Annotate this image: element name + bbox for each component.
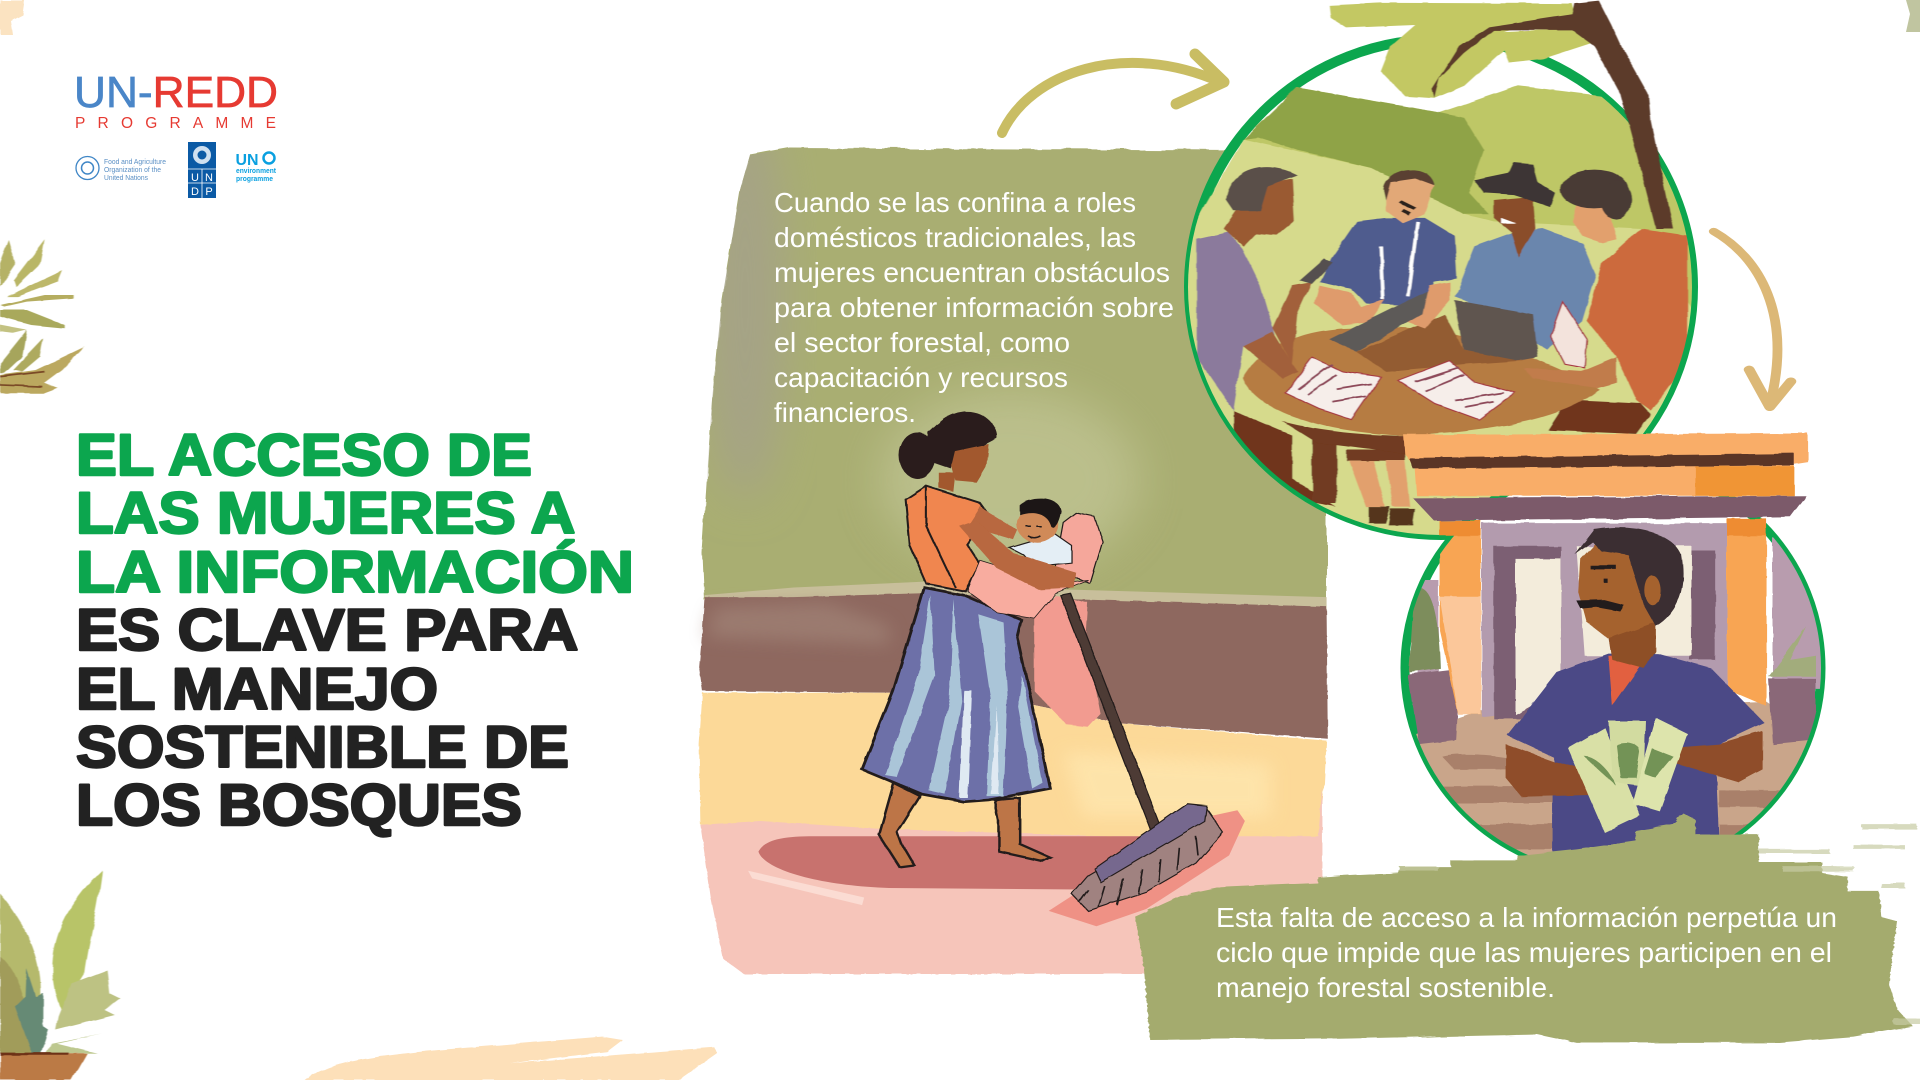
logo: FAO: Organization of the [104, 167, 161, 174]
skirt [862, 588, 1050, 802]
ear [1645, 576, 1661, 605]
blouse [906, 486, 989, 591]
decoration: top-left peach wash [0, 0, 24, 34]
baby head [1017, 506, 1058, 543]
programme: PROGRAMME [75, 115, 276, 132]
wordmark: UN-REDD [74, 68, 278, 117]
hills [1198, 85, 1692, 308]
logo: FAO: Food and Agriculture [104, 159, 166, 166]
circle scene [1179, 86, 1700, 536]
baby shirt [1009, 534, 1072, 566]
upper arm [968, 507, 1018, 540]
roof beam [1413, 496, 1806, 521]
text block: first explanation: el sector forestal, como [774, 327, 1070, 358]
table legs and legs of man [1312, 432, 1405, 504]
broom shadow [1049, 810, 1245, 926]
roof orange [1404, 433, 1808, 496]
logo: UNDP [188, 142, 216, 198]
title: dark part: SOSTENIBLE DE [76, 715, 569, 780]
baby hair [1020, 499, 1061, 527]
table [1243, 328, 1599, 436]
sling tail [1034, 595, 1101, 727]
benches [1233, 411, 1337, 507]
roof stripe [1409, 454, 1794, 468]
panel: watercolor background of woman sweeping [699, 100, 1328, 974]
logo: UN environment programme [236, 152, 277, 183]
man 4 [1587, 229, 1688, 411]
circle ring [1405, 463, 1821, 873]
man 1 [1197, 232, 1275, 411]
text block: first explanation: financieros. [774, 397, 916, 428]
title: green part: LA INFORMACIÓN [76, 540, 634, 605]
faded brush streaks [1399, 824, 1920, 1024]
arrow: olive curved arrow to men [1002, 54, 1224, 133]
wall wash: grey left edge and pale halo [705, 100, 1140, 570]
title [76, 423, 634, 838]
decoration: bottom-left potted plant [0, 870, 120, 1080]
text block: first explanation: para obtener información sobre [774, 292, 1174, 323]
moustache [1577, 600, 1624, 612]
tree trunk [1432, 1, 1673, 229]
pots and plants [1409, 588, 1440, 673]
circle ring [1189, 39, 1693, 535]
eyes and brow [1591, 567, 1616, 581]
skirt stripes [885, 595, 1042, 796]
title: dark part: ES CLAVE PARA [76, 598, 577, 663]
panel: green brush behind bottom text [1135, 814, 1920, 1043]
band: pink floor [700, 787, 1322, 974]
title: dark part: EL MANEJO [76, 657, 438, 722]
logo: UN environment programme: UN [236, 152, 258, 169]
sling back [1055, 513, 1103, 584]
logo: UNDP: N [205, 172, 213, 184]
illustration: woman with baby and broom [862, 411, 1223, 911]
arms [1506, 744, 1616, 797]
baby [1009, 499, 1072, 566]
decoration: bottom peach brush stroke [305, 1037, 717, 1080]
shadow under woman [758, 836, 1146, 890]
logo: UN-REDD Programme [74, 68, 278, 198]
laptops [1329, 291, 1427, 352]
hair [926, 411, 997, 469]
side wall [1773, 538, 1826, 689]
text block: first explanation: Cuando se las confina a roles [774, 187, 1136, 218]
broom head [1094, 804, 1206, 882]
man 2 shirt lines [1381, 221, 1418, 300]
logo: FAO: United Nations [104, 175, 148, 182]
band: yellow floor [699, 693, 1327, 840]
text block: first explanation: capacitación y recursos [774, 362, 1068, 393]
column caps [1440, 519, 1767, 536]
baby face [1026, 526, 1041, 538]
neck [939, 473, 955, 492]
man 3 [1454, 229, 1596, 350]
books on table [1285, 357, 1381, 420]
door wall [1482, 523, 1727, 717]
house roof and man [1404, 433, 1808, 854]
text block: first explanation: mujeres encuentran obstáculos [774, 257, 1170, 288]
circle scene [1408, 518, 1821, 855]
text block: first explanation: domésticos tradicionales, las [774, 222, 1136, 253]
sling [968, 561, 1088, 618]
tree foliage and trunk [1329, 1, 1673, 229]
hair bun [899, 433, 936, 478]
illustration: man with money in front of house [1395, 433, 1830, 883]
face [1579, 529, 1668, 639]
text block: second explanation: manejo forestal sostenible. [1216, 972, 1555, 1003]
band: pale tan and brown wainscot [699, 582, 1328, 974]
columns [1440, 521, 1481, 715]
man 4 curly hair [1560, 170, 1632, 220]
title: green part: EL ACCESO DE [76, 423, 532, 488]
man 2 [1319, 218, 1457, 307]
band: olive wall [702, 148, 1326, 610]
bristle ticks [1080, 836, 1198, 907]
money [1568, 727, 1640, 832]
blouse fold [926, 486, 955, 588]
collar [1608, 656, 1648, 706]
broom handle [1060, 593, 1162, 832]
logo: FAO [76, 156, 166, 182]
shirt [1508, 654, 1765, 854]
text block: second explanation: ciclo que impide que las mujeres participen en el [1216, 937, 1832, 968]
logo: UNDP: U [191, 172, 199, 184]
lower arm [960, 521, 1076, 589]
face [951, 444, 989, 482]
logo: UNDP: P [205, 186, 213, 198]
title: green part: LAS MUJERES A [76, 481, 574, 546]
logo: UNDP: D [191, 186, 199, 198]
neck [1608, 618, 1656, 668]
decoration: left leaves [0, 239, 85, 393]
broom bristles [1072, 806, 1223, 911]
text block: second explanation: Esta falta de acceso a la información perpetúa un [1216, 902, 1837, 933]
arrow: tan curved arrow to house [1714, 231, 1791, 407]
title: dark part: LOS BOSQUES [76, 773, 522, 838]
hair [1575, 527, 1683, 626]
decoration: top-right green wash [1906, 0, 1920, 32]
man 2 arms [1315, 282, 1450, 329]
illustration: group of men around table [1179, 1, 1700, 536]
floor [1395, 702, 1830, 883]
legs [879, 783, 920, 867]
logo: UN environment programme: programme [236, 176, 273, 183]
logo: UN environment programme: environment [236, 168, 277, 175]
